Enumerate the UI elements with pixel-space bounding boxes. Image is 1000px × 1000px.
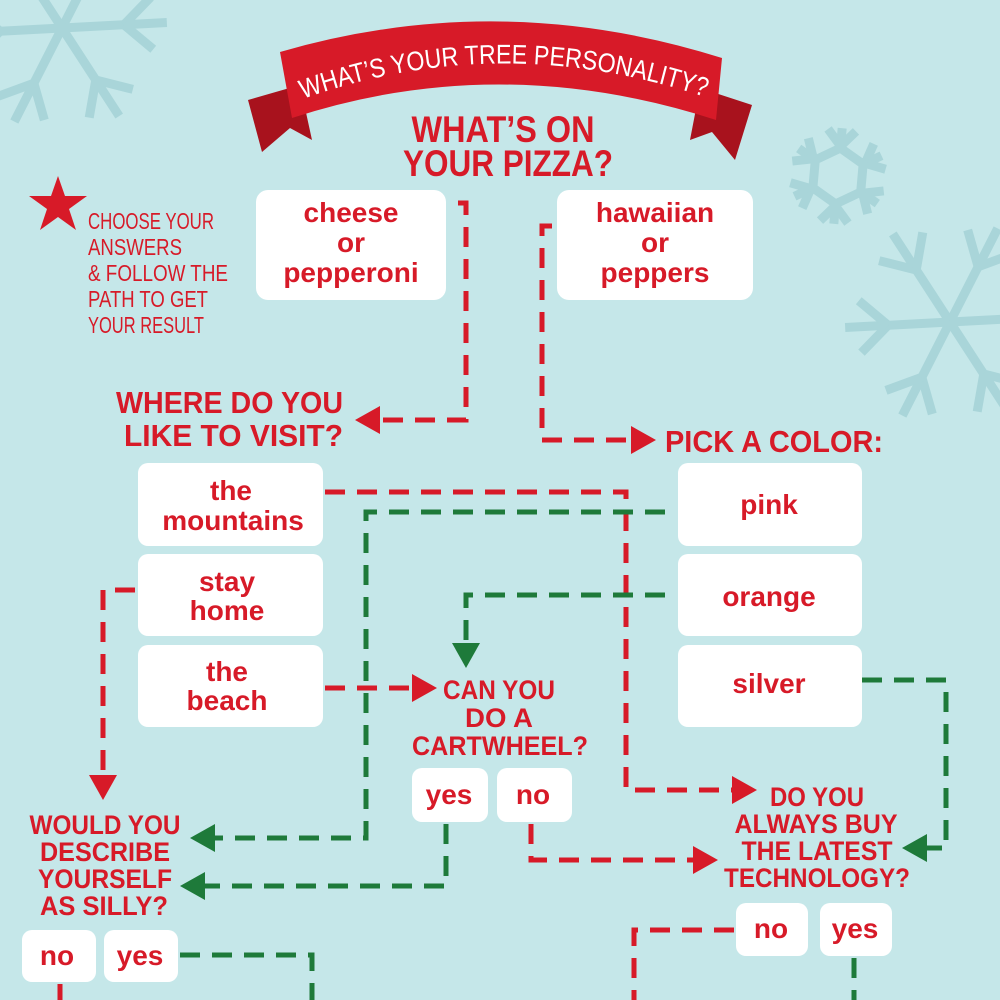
answer box: hawaiian or peppers	[557, 190, 753, 300]
title banner: WHAT’S YOUR TREE PERSONALITY?	[297, 44, 709, 98]
path: silly yes	[180, 955, 312, 1000]
answer box: hawaiian or peppers: peppers	[601, 257, 709, 288]
answer boxes: cartwheel	[412, 768, 572, 822]
instructions with star: PATH TO GET	[88, 286, 208, 312]
answer boxes: cartwheel: no	[516, 779, 550, 810]
answer boxes: color: orange	[722, 581, 816, 612]
question: silly: AS SILLY?	[40, 891, 168, 921]
path: cheese to visit	[355, 203, 466, 434]
instructions with star: & FOLLOW THE	[88, 260, 228, 286]
path: cartwheel no	[531, 824, 718, 874]
path: technology yes	[852, 958, 856, 1000]
answer boxes: visit: home	[190, 595, 264, 626]
answer box: hawaiian or peppers: hawaiian	[596, 197, 714, 228]
snowflake decoration small	[785, 124, 891, 228]
path: silver	[862, 680, 946, 862]
answer boxes: color: pink	[740, 489, 798, 520]
question: technology: DO YOU	[770, 782, 864, 812]
snowflake decoration right	[806, 177, 1000, 467]
path: orange	[452, 595, 665, 668]
question: where do you like to visit: LIKE TO VISIT?	[124, 418, 343, 453]
answer boxes: silly: no	[40, 940, 74, 971]
question: silly: YOURSELF	[38, 864, 172, 894]
question: technology: THE LATEST	[742, 836, 893, 866]
snowflake decoration top-left	[0, 0, 202, 169]
instructions with star	[29, 176, 228, 338]
path: stay home	[89, 590, 135, 800]
question: pick a color: PICK A COLOR:	[665, 424, 883, 459]
answer boxes: visit: the	[210, 475, 252, 506]
answer boxes: silly	[22, 930, 178, 982]
question: silly: DESCRIBE	[40, 837, 170, 867]
path: silly no	[58, 984, 62, 1000]
answer box: cheese or pepperoni: cheese	[304, 197, 398, 228]
answer boxes: technology	[736, 903, 892, 956]
path: mountains	[325, 492, 757, 804]
answer box: cheese or pepperoni	[256, 190, 446, 300]
answer boxes: color: silver	[732, 668, 806, 699]
path: technology no	[634, 930, 734, 1000]
answer box: cheese or pepperoni: or	[337, 227, 365, 258]
path: cartwheel yes	[180, 824, 446, 900]
answer boxes: visit: beach	[187, 685, 267, 716]
question: technology: TECHNOLOGY?	[724, 863, 910, 893]
answer boxes: visit	[138, 463, 323, 727]
path: beach	[325, 674, 437, 702]
answer boxes: color	[678, 463, 862, 727]
answer boxes: visit: mountains	[162, 505, 304, 536]
question: pizza: YOUR PIZZA?	[403, 143, 613, 184]
question: silly: WOULD YOU	[30, 810, 180, 840]
path: hawaiian to color	[542, 226, 656, 454]
answer boxes: cartwheel: yes	[426, 779, 472, 810]
answer box: hawaiian or peppers: or	[641, 227, 669, 258]
answer boxes: visit: the	[206, 656, 248, 687]
question: cartwheel: CAN YOU	[443, 675, 555, 705]
answer boxes: visit: stay	[199, 566, 255, 597]
question: where do you like to visit: WHERE DO YOU	[116, 385, 343, 420]
answer boxes: technology: yes	[832, 913, 878, 944]
answer boxes: silly: yes	[117, 940, 163, 971]
question: cartwheel: CARTWHEEL?	[412, 731, 588, 761]
instructions with star: YOUR RESULT	[88, 312, 204, 338]
instructions with star: CHOOSE YOUR	[88, 208, 214, 234]
title banner	[248, 21, 752, 160]
answer box: cheese or pepperoni: pepperoni	[283, 257, 419, 288]
path: pink	[190, 512, 665, 852]
answer boxes: technology: no	[754, 913, 788, 944]
instructions with star: ANSWERS	[88, 234, 182, 260]
question: cartwheel: DO A	[465, 703, 533, 733]
question: technology: ALWAYS BUY	[734, 809, 898, 839]
question: pizza: WHAT’S ON	[412, 109, 594, 150]
